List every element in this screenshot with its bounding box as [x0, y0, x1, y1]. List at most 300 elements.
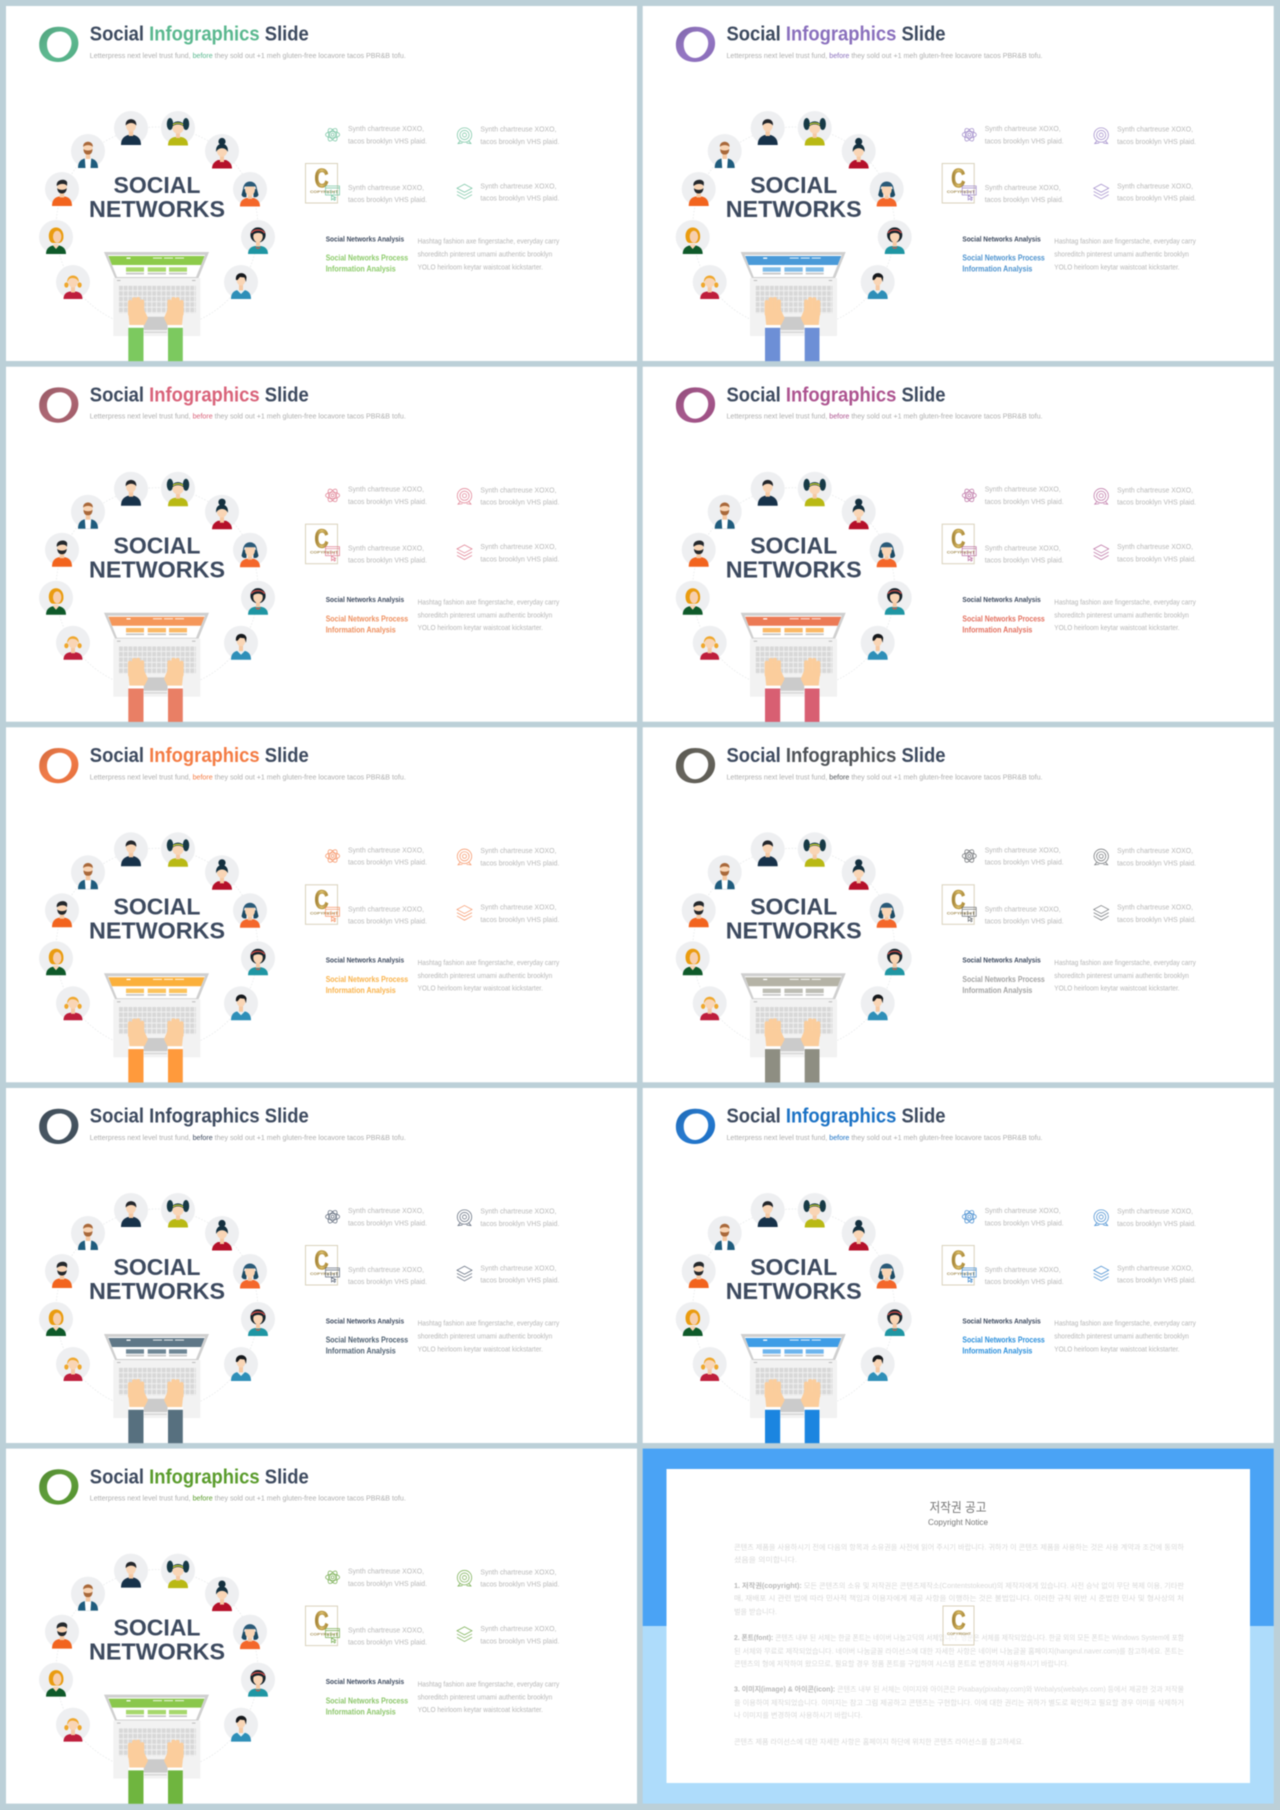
avatar: woman orange hair: [676, 941, 710, 975]
analysis labels: Social Networks Analysis: [962, 234, 1041, 243]
text: item 3: tacos brooklyn VHS plaid.: [985, 1277, 1064, 1286]
slide background: [6, 6, 637, 361]
heading: Social Infographics Slide: [727, 1105, 946, 1128]
watermark badge: [306, 524, 340, 564]
analysis labels: Information Analysis: [962, 265, 1033, 274]
text: item 3: tacos brooklyn VHS plaid.: [348, 1638, 427, 1647]
avatar: man in dark shirt: [114, 832, 148, 866]
text: item 1: Synth chartreuse XOXO,: [348, 1206, 424, 1215]
analysis paragraph: shoreditch pinterest umami authentic brooklyn: [1054, 252, 1189, 259]
analysis paragraph: Hashtag fashion axe fingerstache, everyday carry: [1054, 599, 1196, 606]
text: item 3: [985, 1265, 1064, 1286]
avatar: woman headband: [878, 1302, 912, 1336]
avatar ring diagram: [39, 1193, 275, 1411]
analysis paragraph: Hashtag fashion axe fingerstache, everyday carry: [418, 1681, 560, 1688]
avatar: blonde girl: [56, 265, 90, 299]
text: item 1: Synth chartreuse XOXO,: [985, 124, 1061, 133]
text: item 2: Synth chartreuse XOXO,: [1117, 846, 1193, 855]
watermark badge: [942, 884, 976, 924]
analysis paragraph: Hashtag fashion axe fingerstache, everyday carry: [418, 1321, 560, 1328]
text: item 4: Synth chartreuse XOXO,: [480, 1263, 556, 1272]
laptop with hands: [741, 973, 846, 1082]
panel: copyright notice: [643, 1449, 1274, 1804]
text: item 4: [480, 1624, 559, 1645]
section 3 image and icon: 나 이미지를 변경하여 사용하시기 바랍니다.: [734, 1711, 863, 1720]
analysis paragraph: YOLO heirloom keytar waistcoat kickstarter.: [418, 1707, 543, 1714]
analysis labels: [962, 1316, 1045, 1356]
avatar: man in dark shirt: [751, 832, 785, 866]
section 1 copyright: 벌을 받습니다.: [734, 1607, 777, 1616]
icon: atom: [962, 127, 976, 142]
avatar: boy blue shirt: [861, 265, 895, 299]
text: item 2: tacos brooklyn VHS plaid.: [480, 1219, 559, 1228]
analysis paragraph: YOLO heirloom keytar waistcoat kickstarter.: [418, 264, 543, 271]
avatar: man in vest: [71, 855, 105, 889]
text: item 3: Synth chartreuse XOXO,: [348, 544, 424, 553]
notice title: 저작권 공고: [930, 1500, 987, 1515]
avatar: girl with pigtails: [798, 472, 832, 506]
text: item 2: tacos brooklyn VHS plaid.: [480, 137, 559, 146]
watermark badge: COPYRIGHT: [947, 189, 975, 194]
text: item 2: Synth chartreuse XOXO,: [480, 1207, 556, 1216]
analysis labels: Information Analysis: [962, 986, 1033, 995]
avatar ring diagram: [39, 111, 275, 329]
avatar: woman headband: [241, 581, 275, 615]
text: item 2: tacos brooklyn VHS plaid.: [480, 858, 559, 867]
avatar ring diagram: [676, 472, 912, 690]
analysis labels: Information Analysis: [326, 265, 396, 274]
text: item 2: [480, 846, 559, 867]
avatar: woman with bun: [842, 134, 876, 168]
avatar: girl with pigtails: [798, 832, 832, 867]
center title: [89, 1615, 225, 1665]
text: item 3: tacos brooklyn VHS plaid.: [985, 195, 1064, 204]
analysis labels: Social Networks Analysis: [326, 234, 404, 243]
text: item 1: [985, 845, 1064, 867]
watermark badge: COPYRIGHT: [310, 1632, 339, 1637]
icon: layers: [1094, 1266, 1109, 1281]
section 2 font: [734, 1633, 1185, 1668]
text: item 4: tacos brooklyn VHS plaid.: [480, 554, 559, 563]
section 3 image and icon: 3. 이미지(image) & 아이콘(icon): 콘텐츠 내부 된 서체는 이미지와 아이콘은 Pixabay(pixabay.com)와 Webalys(webalys.com) 등에서 제공한 것과 저작물: [734, 1685, 1185, 1694]
subtitle: Letterpress next level trust fund, before they sold out +1 meh gluten-free locavore tacos PBR&B tofu.: [727, 1133, 1043, 1142]
watermark badge: [306, 163, 340, 203]
analysis paragraph: shoreditch pinterest umami authentic brooklyn: [418, 1694, 552, 1701]
avatar: man in dark shirt: [114, 111, 148, 145]
avatar: woman orange hair: [39, 1302, 73, 1336]
avatar: woman headband: [241, 220, 275, 254]
avatar: blonde girl: [56, 986, 90, 1020]
analysis paragraph: [418, 1321, 560, 1353]
text: item 3: Synth chartreuse XOXO,: [348, 904, 424, 913]
analysis paragraph: [1054, 239, 1196, 271]
watermark badge: C: [314, 163, 329, 193]
analysis labels: Social Networks Process: [962, 254, 1045, 263]
analysis labels: Social Networks Process: [326, 975, 409, 984]
text: item 1: tacos brooklyn VHS plaid.: [985, 858, 1064, 867]
heading: Social Infographics Slide: [90, 1105, 309, 1128]
heading: Social Infographics Slide: [727, 23, 946, 46]
avatar: boy blue shirt: [861, 986, 895, 1020]
text: item 4: tacos brooklyn VHS plaid.: [1117, 1276, 1196, 1285]
heading: Social Infographics Slide: [90, 383, 309, 406]
text: item 1: Synth chartreuse XOXO,: [985, 845, 1061, 854]
text: item 1: tacos brooklyn VHS plaid.: [348, 136, 427, 145]
watermark badge: C: [951, 163, 965, 193]
watermark badge: C: [952, 1605, 966, 1635]
text: item 2: Synth chartreuse XOXO,: [480, 846, 556, 855]
avatar: woman headband: [241, 1663, 275, 1697]
section 2 font: 2. 폰트(font): 콘텐츠 내부 된 서체는 한글 폰트는 네이버 나눔고딕의 서체입니다. 영문은 서체를 제작되었습니다. 한글 외의 모든 폰트는 Windows System에 포함: [734, 1633, 1185, 1642]
watermark badge: COPYRIGHT: [310, 910, 339, 915]
avatar: man in dark shirt: [751, 1193, 785, 1227]
text: item 1: tacos brooklyn VHS plaid.: [348, 497, 427, 506]
avatar: girl with pigtails: [161, 111, 195, 146]
subtitle: Letterpress next level trust fund, before they sold out +1 meh gluten-free locavore tacos PBR&B tofu.: [90, 1494, 406, 1503]
icon: atom: [326, 488, 340, 503]
text: item 3: [348, 1626, 427, 1647]
avatar: woman blue hair: [233, 893, 267, 928]
avatar ring diagram: [39, 1554, 275, 1772]
avatar: man in dark shirt: [114, 1193, 148, 1227]
watermark badge: C: [314, 524, 329, 554]
analysis labels: [326, 595, 409, 634]
center title: SOCIAL: [750, 172, 837, 198]
avatar: man in dark shirt: [751, 472, 785, 506]
avatar: bearded man: [682, 893, 716, 927]
avatar: woman orange hair: [676, 220, 710, 254]
text: item 4: Synth chartreuse XOXO,: [480, 542, 556, 551]
avatar ring diagram: [676, 111, 912, 329]
icon: target: [457, 128, 472, 144]
laptop with hands: [104, 1695, 209, 1804]
center title: [89, 172, 225, 222]
icon: atom: [326, 1209, 340, 1224]
analysis labels: Social Networks Analysis: [326, 1677, 404, 1686]
analysis labels: Information Analysis: [962, 625, 1033, 634]
watermark badge: COPYRIGHT: [947, 1631, 972, 1636]
text: item 3: tacos brooklyn VHS plaid.: [348, 195, 427, 204]
avatar: woman blue hair: [870, 172, 904, 206]
icon: atom: [962, 488, 976, 503]
avatar: blonde girl: [56, 1708, 90, 1742]
text: item 3: [985, 183, 1064, 204]
analysis paragraph: [418, 960, 560, 993]
avatar: woman orange hair: [676, 1302, 710, 1336]
avatar: man in vest: [708, 855, 742, 889]
avatar: woman with bun: [205, 134, 239, 168]
heading: Social Infographics Slide: [727, 383, 946, 406]
avatar: woman blue hair: [870, 533, 904, 567]
center title: [726, 533, 862, 583]
slide background: [643, 6, 1274, 361]
avatar: man in vest: [71, 1577, 105, 1611]
panel: slide 5 orange: [6, 727, 637, 1082]
avatar: girl with pigtails: [161, 832, 195, 867]
icon: layers: [457, 1627, 472, 1642]
text: item 3: [985, 544, 1064, 565]
watermark badge: COPYRIGHT: [947, 910, 975, 915]
avatar: man in dark shirt: [751, 111, 785, 145]
text: item 2: Synth chartreuse XOXO,: [1117, 1207, 1193, 1216]
avatar: bearded man: [682, 533, 716, 567]
text: item 3: [348, 1265, 427, 1286]
icon: target: [457, 1570, 472, 1586]
analysis paragraph: shoreditch pinterest umami authentic brooklyn: [1054, 973, 1189, 980]
avatar: boy blue shirt: [861, 1347, 895, 1381]
analysis paragraph: Hashtag fashion axe fingerstache, everyday carry: [418, 960, 560, 967]
watermark badge: C: [951, 884, 965, 914]
avatar: blonde girl: [693, 1347, 727, 1381]
text: item 1: [348, 1567, 427, 1588]
text: item 2: [480, 1207, 559, 1228]
watermark badge: [306, 884, 340, 924]
watermark badge: C: [314, 1606, 329, 1636]
text: item 3: [348, 183, 427, 204]
avatar: woman orange hair: [39, 581, 73, 615]
panel: slide 2 purple: [643, 6, 1274, 361]
text: item 3: tacos brooklyn VHS plaid.: [985, 556, 1064, 565]
avatar: blonde girl: [693, 986, 727, 1020]
watermark badge: COPYRIGHT: [310, 189, 339, 194]
icon: layers: [457, 1266, 472, 1281]
center title: NETWORKS: [726, 196, 862, 222]
icon: target: [1094, 128, 1108, 144]
text: item 2: tacos brooklyn VHS plaid.: [480, 498, 559, 507]
laptop with hands: [104, 252, 209, 361]
analysis labels: [326, 234, 409, 274]
icon: layers: [1094, 545, 1109, 560]
text: item 3: tacos brooklyn VHS plaid.: [348, 1277, 427, 1286]
analysis labels: Information Analysis: [962, 1347, 1033, 1356]
icon: target: [457, 849, 472, 865]
avatar: woman with bun: [205, 495, 239, 529]
avatar: bearded man: [45, 1254, 79, 1288]
avatar: boy blue shirt: [224, 1708, 258, 1742]
heading: Social Infographics Slide: [727, 744, 946, 767]
text: item 3: [348, 544, 427, 565]
icon: logo ring: [676, 27, 715, 62]
text: item 2: [1117, 1207, 1196, 1228]
text: item 3: Synth chartreuse XOXO,: [348, 183, 424, 192]
avatar: man in vest: [71, 1216, 105, 1250]
avatar: woman with bun: [205, 855, 239, 890]
avatar: man in vest: [708, 134, 742, 168]
text: item 4: Synth chartreuse XOXO,: [480, 1624, 556, 1633]
text: item 4: Synth chartreuse XOXO,: [480, 903, 556, 912]
subtitle: Letterpress next level trust fund, before they sold out +1 meh gluten-free locavore tacos PBR&B tofu.: [727, 51, 1043, 60]
watermark badge: COPYRIGHT: [947, 1271, 975, 1276]
analysis labels: Information Analysis: [326, 625, 396, 634]
center title: SOCIAL: [750, 893, 837, 919]
text: item 4: Synth chartreuse XOXO,: [1117, 181, 1193, 190]
center title: [89, 1254, 225, 1304]
text: item 2: tacos brooklyn VHS plaid.: [1117, 1219, 1196, 1228]
subtitle: Letterpress next level trust fund, before they sold out +1 meh gluten-free locavore tacos PBR&B tofu.: [90, 1133, 406, 1142]
avatar: blonde girl: [56, 626, 90, 660]
avatar: woman blue hair: [233, 172, 267, 206]
slide background: [6, 1449, 637, 1804]
avatar: blonde girl: [693, 626, 727, 660]
analysis paragraph: Hashtag fashion axe fingerstache, everyday carry: [1054, 960, 1196, 967]
laptop with hands: [741, 252, 846, 361]
text: item 1: [985, 485, 1064, 506]
light blue lower background: [643, 1626, 1274, 1804]
text: item 4: tacos brooklyn VHS plaid.: [1117, 554, 1196, 563]
text: item 3: [348, 904, 427, 925]
text: item 4: Synth chartreuse XOXO,: [1117, 542, 1193, 551]
text: item 2: Synth chartreuse XOXO,: [480, 125, 556, 134]
text: item 1: [348, 845, 427, 867]
icon: atom: [326, 848, 340, 864]
subtitle: Letterpress next level trust fund, before they sold out +1 meh gluten-free locavore tacos PBR&B tofu.: [727, 772, 1043, 781]
analysis labels: Social Networks Analysis: [962, 956, 1041, 965]
analysis paragraph: Hashtag fashion axe fingerstache, everyday carry: [418, 599, 560, 606]
intro paragraph: 콘텐츠 제품을 사용하시기 전에 다음의 항목과 소유권을 사전에 읽어 주시기 바랍니다. 귀하가 이 콘텐츠 제품을 사용하는 것은 사용 계약과 조건에 동의하: [734, 1542, 1185, 1552]
center title: NETWORKS: [726, 917, 862, 943]
text: item 3: Synth chartreuse XOXO,: [985, 544, 1061, 553]
text: item 2: Synth chartreuse XOXO,: [1117, 485, 1193, 494]
avatar: man in vest: [708, 1216, 742, 1250]
text: item 1: [348, 1206, 427, 1227]
panel: slide 8 blue: [643, 1088, 1274, 1443]
avatar: bearded man: [45, 893, 79, 927]
analysis paragraph: [418, 239, 560, 271]
watermark badge: COPYRIGHT: [947, 550, 975, 555]
watermark badge: [942, 524, 976, 564]
watermark badge: [942, 1245, 976, 1285]
analysis labels: [962, 234, 1045, 274]
text: item 4: tacos brooklyn VHS plaid.: [1117, 915, 1196, 924]
center title: [726, 893, 862, 943]
slide background: [6, 727, 637, 1082]
text: item 1: [348, 485, 427, 506]
text: item 3: Synth chartreuse XOXO,: [985, 1265, 1061, 1274]
watermark badge: C: [314, 1245, 329, 1275]
avatar: woman blue hair: [233, 1615, 267, 1649]
avatar: woman orange hair: [39, 941, 73, 975]
text: item 3: tacos brooklyn VHS plaid.: [985, 916, 1064, 925]
icon: atom: [326, 1570, 340, 1585]
text: item 4: Synth chartreuse XOXO,: [480, 181, 556, 190]
text: item 2: tacos brooklyn VHS plaid.: [1117, 858, 1196, 867]
icon: layers: [457, 184, 472, 199]
text: item 2: [1117, 485, 1196, 507]
text: item 4: [1117, 181, 1196, 203]
text: item 3: tacos brooklyn VHS plaid.: [348, 916, 427, 925]
text: item 3: Synth chartreuse XOXO,: [985, 183, 1061, 192]
watermark badge: [306, 1245, 340, 1285]
avatar: boy blue shirt: [861, 626, 895, 660]
analysis labels: Social Networks Process: [326, 1336, 409, 1345]
avatar: girl with pigtails: [798, 111, 832, 146]
icon: logo ring: [39, 748, 78, 783]
watermark badge: [306, 1606, 340, 1646]
analysis paragraph: YOLO heirloom keytar waistcoat kickstarter.: [1054, 264, 1180, 271]
icon: layers: [457, 906, 472, 920]
avatar: woman headband: [878, 581, 912, 615]
analysis paragraph: YOLO heirloom keytar waistcoat kickstarter.: [418, 1346, 543, 1353]
center title: SOCIAL: [750, 1254, 837, 1280]
slide background: [643, 727, 1274, 1082]
icon: atom: [326, 127, 340, 142]
analysis paragraph: YOLO heirloom keytar waistcoat kickstarter.: [1054, 1346, 1180, 1353]
icon: logo ring: [39, 1469, 78, 1505]
analysis paragraph: [1054, 960, 1196, 993]
section 1 copyright: 매, 재배포 시 관련 법에 따라 민사적 책임과 이용자에게 제공 사항을 이행하는 것은 불법입니다. 이러한 규칙 위반 시 준법한 민사 및 형사상의 처: [734, 1594, 1184, 1603]
analysis labels: [326, 956, 409, 995]
avatar: man in vest: [71, 134, 105, 168]
text: item 4: [1117, 542, 1196, 563]
avatar: boy blue shirt: [224, 1347, 258, 1381]
analysis paragraph: [1054, 599, 1196, 632]
avatar: woman with bun: [205, 1577, 239, 1611]
analysis paragraph: shoreditch pinterest umami authentic brooklyn: [418, 612, 552, 619]
watermark badge: COPYRIGHT: [310, 550, 339, 555]
laptop with hands: [104, 973, 209, 1082]
text: item 4: [480, 181, 559, 203]
analysis paragraph: shoreditch pinterest umami authentic brooklyn: [418, 1334, 552, 1341]
text: item 1: Synth chartreuse XOXO,: [348, 124, 424, 133]
section 3 image and icon: [734, 1685, 1185, 1720]
center title: SOCIAL: [750, 533, 837, 559]
laptop with hands: [741, 1334, 846, 1443]
avatar: man in dark shirt: [114, 472, 148, 506]
analysis labels: [326, 1677, 409, 1716]
analysis labels: [326, 1316, 409, 1356]
analysis labels: Social Networks Process: [962, 975, 1045, 984]
center title: SOCIAL: [114, 1615, 200, 1641]
icon: logo ring: [39, 27, 78, 62]
text: item 3: Synth chartreuse XOXO,: [348, 1265, 424, 1274]
text: item 4: [1117, 1263, 1196, 1285]
center title: [89, 893, 225, 943]
analysis paragraph: shoreditch pinterest umami authentic brooklyn: [418, 252, 552, 259]
avatar: woman with bun: [842, 1216, 876, 1250]
avatar: boy blue shirt: [224, 265, 258, 299]
text: item 2: [1117, 125, 1196, 146]
analysis labels: Social Networks Analysis: [326, 1316, 404, 1325]
text: item 2: [480, 125, 559, 146]
avatar: woman with bun: [842, 855, 876, 890]
avatar: girl with pigtails: [161, 472, 195, 506]
panel: slide 7 slate: [6, 1088, 637, 1443]
analysis paragraph: Hashtag fashion axe fingerstache, everyday carry: [418, 239, 560, 246]
icon: target: [1094, 488, 1108, 504]
text: item 1: Synth chartreuse XOXO,: [348, 1567, 424, 1576]
text: item 1: Synth chartreuse XOXO,: [985, 485, 1061, 494]
analysis paragraph: YOLO heirloom keytar waistcoat kickstarter.: [1054, 625, 1180, 632]
avatar: bearded man: [682, 1254, 716, 1288]
heading: Social Infographics Slide: [90, 1465, 309, 1488]
text: item 4: [480, 542, 559, 563]
text: item 2: [480, 1567, 559, 1589]
watermark badge: COPYRIGHT: [310, 1271, 339, 1276]
subtitle: Letterpress next level trust fund, before they sold out +1 meh gluten-free locavore tacos PBR&B tofu.: [90, 772, 406, 781]
subtitle: Letterpress next level trust fund, before they sold out +1 meh gluten-free locavore tacos PBR&B tofu.: [90, 51, 406, 60]
icon: logo ring: [676, 387, 715, 423]
analysis paragraph: Hashtag fashion axe fingerstache, everyday carry: [1054, 239, 1196, 246]
panel: slide 1 green: [6, 6, 637, 361]
slide background: [6, 367, 637, 722]
intro paragraph: 셨음을 의미합니다.: [734, 1555, 797, 1564]
closing line: 콘텐츠 제품 라이선스에 대한 자세한 사항은 홈페이지 하단에 위치한 콘텐츠 라이선스를 참고하세요.: [734, 1737, 1024, 1746]
avatar ring diagram: [676, 832, 912, 1050]
analysis paragraph: YOLO heirloom keytar waistcoat kickstarter.: [1054, 986, 1180, 993]
avatar: blonde girl: [56, 1347, 90, 1381]
text: item 4: tacos brooklyn VHS plaid.: [480, 1276, 559, 1285]
text: item 1: [348, 124, 427, 145]
